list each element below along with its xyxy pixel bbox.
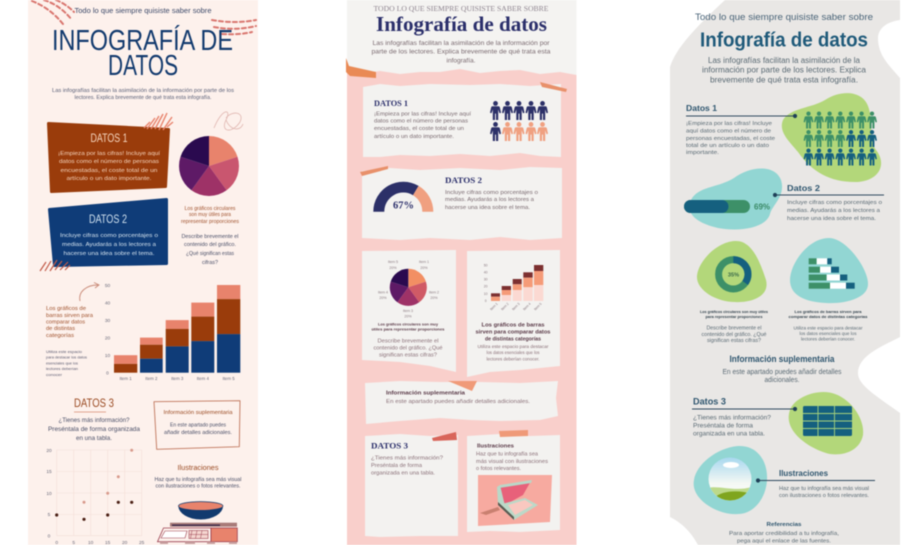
panel: datos 2 <box>684 168 884 229</box>
caption: lectores deberían conocer. <box>486 356 540 362</box>
pie labels <box>378 260 439 318</box>
body text <box>371 456 444 476</box>
body text: ¡Empieza por las cifras! Incluye <box>686 121 772 127</box>
body text: artículo o un dato importante. <box>66 176 152 182</box>
bar chart note: conocer <box>46 372 63 377</box>
stacked bars: 30 <box>484 278 488 282</box>
y axis labels: 10 <box>105 353 110 359</box>
pie labels: 20% <box>420 266 428 270</box>
donut caption: para representar proporciones <box>706 314 763 319</box>
bars caption: los datos esenciales que los <box>800 331 857 336</box>
callout: información suplementaria: añadir detalles adicionales. <box>164 430 232 436</box>
tape <box>432 432 457 441</box>
pie caption: cifras? <box>202 260 218 266</box>
caption: Los gráficos de barras <box>482 322 544 328</box>
blob <box>782 93 881 182</box>
pie caption: representar proporciones <box>181 219 239 225</box>
intro text: lectores. Explica brevemente de qué trata esta infografía. <box>74 95 212 101</box>
intro text <box>52 88 234 101</box>
body text: aquí datos como el número de <box>686 128 771 134</box>
staircase bars <box>809 258 855 289</box>
pie caption: Los gráficos circulares <box>184 206 236 212</box>
intro text: infografía. <box>446 58 476 64</box>
pie chart <box>390 269 427 306</box>
stacked bars: Item 2 <box>500 302 510 311</box>
referencias: Referencias <box>766 522 802 528</box>
información suplementaria: Información suplementaria <box>730 354 835 364</box>
datos 3 text: Preséntala de forma organizada <box>48 427 141 433</box>
panel: ilustraciones card <box>467 430 560 532</box>
body text: Incluye cifras como porcentajes o <box>787 200 882 206</box>
bars caption: lectores deberían conocer. <box>801 336 855 342</box>
stacked bars: 50 <box>484 264 488 268</box>
panel: información suplementaria card <box>365 381 558 424</box>
body text: Preséntala de forma <box>693 424 754 430</box>
caption: significan estas cifras? <box>379 352 438 358</box>
tape <box>360 166 388 176</box>
bars caption <box>788 309 868 342</box>
icon: people pictogram <box>804 112 877 166</box>
información suplementaria: En este apartado puedes añadir detalles <box>722 369 842 376</box>
body text <box>58 151 160 182</box>
gauge chart: 67% <box>393 200 414 212</box>
callout: información suplementaria: En este apartado puedes <box>170 422 226 428</box>
donut caption: Los gráficos circulares son muy útiles <box>700 309 769 314</box>
heading: Datos 3 <box>693 396 726 406</box>
panel: left infographic <box>28 0 258 545</box>
tagline: TODO LO QUE SIEMPRE QUISISTE SABER SOBRE <box>374 4 549 13</box>
panel: datos 2 card <box>360 166 562 240</box>
stacked bars: 10 <box>484 292 488 296</box>
body text: total de un artículo o un dato <box>686 143 769 149</box>
donut chart <box>719 260 748 289</box>
caption: sirven para comparar datos <box>476 330 550 336</box>
caption: de distintas categorías <box>485 336 541 342</box>
pie labels: 20% <box>379 296 387 300</box>
y axis labels <box>105 283 110 376</box>
referencias: pega aquí el enlace de las fuentes. <box>737 538 831 544</box>
icon: table <box>803 406 852 436</box>
ilustraciones text: con ilustraciones o fotos relevantes. <box>156 484 240 490</box>
body text: ¿Tienes más información? <box>371 456 444 462</box>
body text: organizada en una tabla. <box>693 432 765 438</box>
datos 3 text: ¿Tienes más información? <box>58 418 130 424</box>
pie labels: 20% <box>389 266 397 270</box>
donut chart blob <box>697 241 767 302</box>
body text <box>476 452 548 472</box>
bar chart caption: Los gráficos de <box>46 306 86 312</box>
stacked bars: Item 3 <box>511 302 521 311</box>
stacked bars: Item 1 <box>489 302 499 311</box>
caption: los datos esenciales que los <box>486 350 540 355</box>
body text: encuestadas, el coste total de un <box>60 168 158 174</box>
caption: contenido del gráfico. ¿Qué <box>374 346 442 352</box>
x axis labels: Item 1 <box>119 376 132 381</box>
intro text: brevemente de qué trata esta infografía. <box>710 76 858 84</box>
donut caption: contenido del gráfico. ¿Qué <box>702 332 767 338</box>
leader line <box>686 115 795 117</box>
axis labels: 15 <box>46 469 52 475</box>
bars caption: comparar datos de distintas categorías <box>788 314 868 319</box>
heading: DATOS 2 <box>89 212 127 226</box>
panel: right infographic <box>670 0 900 545</box>
y axis labels: 30 <box>105 318 110 324</box>
panel: ilustraciones <box>694 446 875 514</box>
percentage: 69% <box>754 202 770 212</box>
panel: middle infographic <box>346 0 576 545</box>
staircase bar chart blob <box>790 238 868 303</box>
tagline: Todo lo que siempre quisiste saber sobre <box>74 6 212 15</box>
leader line <box>692 408 795 410</box>
pie caption: Describe brevemente el <box>182 234 238 240</box>
body text: ¡Empieza por las cifras! Incluye aquí <box>374 112 472 118</box>
stacked bars <box>484 264 543 311</box>
x axis labels <box>119 376 235 381</box>
percentage: 35% <box>728 272 739 278</box>
panel: bar chart card <box>467 250 560 377</box>
bar chart caption <box>46 306 93 339</box>
pie caption: contenido del gráfico. <box>184 242 236 248</box>
panel: datos 2 <box>50 200 166 266</box>
illustration: open box <box>478 475 552 526</box>
decorative dashes top left <box>32 0 74 24</box>
pie chart <box>179 136 239 196</box>
heading: Ilustraciones <box>477 444 514 450</box>
información suplementaria: adicionales. <box>764 377 800 384</box>
title: DATOS <box>108 50 178 82</box>
stacked bars: 20 <box>484 284 488 288</box>
caption: Describe brevemente el <box>378 338 438 344</box>
panel: datos 1 <box>686 93 881 182</box>
pie caption: ¿Qué significan estas <box>186 251 234 257</box>
leader line <box>758 480 875 482</box>
heading: Datos 2 <box>787 183 820 193</box>
y axis labels: 20 <box>105 336 110 342</box>
bar chart caption: de distintas <box>46 326 75 332</box>
tape <box>499 430 528 437</box>
caption <box>372 322 445 358</box>
dark points <box>55 501 133 521</box>
intro text: parte de los lectores. Explica brevemente de qué trata esta <box>372 50 551 56</box>
bar chart caption: barras sirven para <box>46 313 93 319</box>
body text: más visual con ilustraciones <box>476 459 548 465</box>
caption: Utiliza este espacio para destacar <box>478 344 549 349</box>
bar chart note <box>46 349 87 377</box>
body text: o fotos relevantes. <box>476 466 521 472</box>
bar chart note: esenciales que los <box>46 360 78 366</box>
heading: DATOS 2 <box>445 175 482 185</box>
tape <box>540 82 567 92</box>
referencias: Para aportar credibilidad a tu infografía, <box>729 531 839 537</box>
x axis labels: Item 3 <box>171 376 184 381</box>
datos 3 heading: DATOS 3 <box>74 396 114 410</box>
caption: Los gráficos circulares son muy <box>378 322 439 326</box>
bar chart caption: categorías <box>46 333 74 339</box>
title: Infografía de datos <box>376 12 547 36</box>
axis labels: 0 <box>48 534 51 540</box>
stacked bars: 0 <box>485 299 487 303</box>
title: INFOGRAFÍA DE <box>52 24 233 57</box>
heading: Datos 1 <box>686 103 717 113</box>
decorative dashes top right <box>212 20 256 34</box>
ilustraciones text: Ilustraciones <box>178 465 219 472</box>
axis labels: 10 <box>46 491 52 497</box>
gauge chart <box>373 182 433 212</box>
tagline: Todo lo que siempre quisiste saber sobre <box>695 12 873 22</box>
heading: DATOS 1 <box>90 131 128 145</box>
pie labels: 20% <box>404 314 412 318</box>
leader line <box>775 194 884 196</box>
body text <box>787 200 882 222</box>
body text: personas encuestadas, el coste <box>686 136 775 142</box>
pie labels: Item 4 <box>378 290 388 294</box>
axis labels: 20 <box>46 448 52 454</box>
panel: datos 3 card <box>365 432 458 537</box>
panel: datos 1 <box>48 113 173 192</box>
stacked bars: Item 5 <box>533 302 543 311</box>
body text: medias. Ayudarás a los lectores a <box>787 208 880 214</box>
body text: datos como el número de personas <box>374 118 468 124</box>
callout: información suplementaria <box>154 401 240 449</box>
body text: Haz que tu infografía sea más visual <box>779 486 869 492</box>
intro text: Las infografías facilitan la asimilación de la información por parte de los <box>52 88 234 94</box>
pie labels: Item 2 <box>429 290 439 294</box>
pie labels: Item 5 <box>388 260 398 264</box>
body text: Incluye cifras como porcentajes o <box>60 233 158 239</box>
body text <box>693 416 772 438</box>
tape <box>346 58 376 78</box>
panel: datos 1 card <box>363 82 567 157</box>
pie labels: 20% <box>430 296 438 300</box>
body text: medias. Ayudarás a los lectores a <box>445 197 534 203</box>
title <box>52 24 233 82</box>
intro text: Las infografías facilitan la asimilación de la información por <box>372 41 550 47</box>
donut caption: significan estas cifras? <box>707 338 761 344</box>
icon: hatch scribble <box>40 260 70 271</box>
caption: útiles para representar proporciones <box>372 326 445 332</box>
body text: ¡Empieza por las cifras! Incluye aquí <box>58 151 160 157</box>
arrow <box>80 282 99 301</box>
donut caption <box>700 309 769 344</box>
body text: artículo o un dato importante. <box>374 134 454 140</box>
bars <box>114 285 240 373</box>
body text: hacerse una idea sobre el tema. <box>445 205 530 211</box>
body text: hacerse una idea sobre el tema. <box>64 251 155 257</box>
pie caption <box>181 206 239 266</box>
stacked bars: Item 4 <box>522 302 532 311</box>
pie caption: son muy útiles para <box>189 212 231 218</box>
y axis labels: 40 <box>105 300 110 306</box>
body text: Preséntala de forma <box>371 463 423 469</box>
blob <box>694 446 767 514</box>
body text <box>779 486 869 499</box>
tape <box>448 381 477 391</box>
caption <box>476 322 550 362</box>
bar chart caption: comparar datos <box>46 320 85 326</box>
body text: datos como el número de personas <box>59 159 159 165</box>
body text <box>686 121 775 156</box>
callout: información suplementaria: Información suplementaria <box>164 410 233 416</box>
body text: con ilustraciones o fotos relevantes. <box>779 493 869 499</box>
body text: encuestadas, el coste total de un <box>374 126 464 132</box>
bar chart note: para destacar los datos <box>46 354 87 360</box>
x axis labels: Item 2 <box>145 376 158 381</box>
body text: medias. Ayudarás a los lectores a <box>62 242 157 248</box>
heading: DATOS 3 <box>371 440 408 450</box>
body text <box>445 190 538 211</box>
ilustraciones text <box>154 465 242 490</box>
pie labels: Item 3 <box>403 309 413 313</box>
blob <box>789 392 863 454</box>
bar chart note: lectores deberían <box>46 366 78 371</box>
bars caption: Los gráficos de barras sirven para <box>794 309 862 314</box>
illustration: landscape circle <box>708 458 752 502</box>
body text: importante. <box>686 150 719 156</box>
panel: datos 3 <box>692 392 863 454</box>
bar chart note: Utiliza este espacio <box>46 349 83 354</box>
body text: ¿Tienes más información? <box>693 416 772 422</box>
pie labels: Item 1 <box>419 260 429 264</box>
body text: En este apartado puedes añadir detalles adicionales. <box>386 399 530 405</box>
body text: hacerse una idea sobre el tema. <box>787 216 876 222</box>
pale points <box>82 449 133 504</box>
icon: bowl on scale <box>158 502 237 544</box>
scatter chart <box>46 448 145 545</box>
x axis labels: Item 5 <box>222 376 235 381</box>
heading: DATOS 1 <box>374 98 408 108</box>
icon: pale scribble loops <box>214 112 243 130</box>
panel: pie chart card <box>362 250 456 372</box>
axis labels: 5 <box>48 512 51 518</box>
bars caption: Utiliza este espacio para destacar <box>794 326 863 330</box>
x axis labels: Item 4 <box>197 376 209 381</box>
información suplementaria <box>722 354 842 384</box>
intro text <box>372 41 551 64</box>
donut caption: Describe brevemente el <box>706 326 762 332</box>
body text <box>60 233 158 257</box>
stacked bar chart <box>105 283 240 381</box>
icon: hatch scribble <box>144 113 173 130</box>
datos 3 text: en una tabla. <box>76 436 112 442</box>
referencias <box>729 522 839 544</box>
blob <box>689 168 782 229</box>
axis labels <box>46 448 145 545</box>
title: Infografía de datos <box>700 30 868 52</box>
progress bar <box>684 200 750 213</box>
icon: people pictogram <box>490 101 548 141</box>
intro text: Las infografías facilitan la asimilación de la <box>708 56 861 65</box>
heading: Información suplementaria <box>386 390 466 396</box>
ilustraciones text: Haz que tu infografía sea más visual <box>154 477 242 483</box>
body text <box>374 112 472 140</box>
body text: Incluye cifras como porcentajes o <box>445 190 538 196</box>
y axis labels: 0 <box>106 370 109 376</box>
stacked bars: 40 <box>484 270 488 274</box>
body text: Haz que tu infografía sea <box>476 452 538 458</box>
intro text: información por parte de los lectores. Explica <box>702 66 867 74</box>
heading: Ilustraciones <box>779 469 828 478</box>
datos 3 text <box>48 418 141 442</box>
body text: organizada en una tabla. <box>371 470 435 476</box>
y axis labels: 50 <box>105 283 110 289</box>
intro text <box>702 56 867 84</box>
